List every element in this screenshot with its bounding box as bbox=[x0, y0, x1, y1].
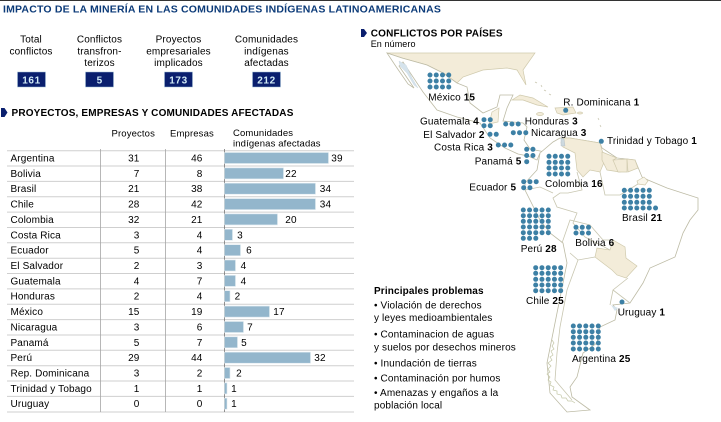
row: El Salvador: 3 bbox=[197, 261, 203, 272]
row: Panamá: Panamá bbox=[10, 338, 49, 349]
row: Rep. Dominicana: 2 bbox=[197, 368, 203, 380]
row: Chile bbox=[10, 199, 331, 211]
stat: total conflictos bbox=[9, 34, 53, 87]
row: Trinidad y Tobago: 1 bbox=[231, 384, 237, 395]
country labels: Guatemala 4 bbox=[420, 116, 479, 128]
table headers: Comunidades bbox=[233, 128, 293, 139]
country labels: El Salvador 2 bbox=[423, 130, 485, 141]
land: South America bbox=[525, 138, 698, 412]
row: Ecuador: 6 bbox=[246, 246, 252, 257]
dots: Uruguay bbox=[620, 300, 624, 304]
row: Costa Rica: 3 bbox=[134, 230, 140, 241]
land: Guyana bbox=[602, 152, 620, 172]
row: Panamá: 5 bbox=[134, 338, 140, 349]
dots: Colombia bbox=[549, 156, 568, 174]
text block: principales problemas: • Violación de derechos bbox=[374, 301, 482, 312]
row: Chile: 42 bbox=[191, 200, 203, 211]
table headers: Proyectos bbox=[112, 128, 155, 140]
row: Colombia: 20 bbox=[285, 215, 297, 226]
land: United States bbox=[387, 53, 535, 85]
row: Costa Rica: 3 bbox=[237, 230, 243, 241]
row: El Salvador bbox=[10, 260, 247, 272]
country labels: R. Dominicana 1 bbox=[563, 98, 640, 108]
row: Ecuador: 5 bbox=[134, 246, 140, 257]
row: Trinidad y Tobago bbox=[10, 383, 237, 395]
row: Trinidad y Tobago: Trinidad y Tobago bbox=[10, 384, 92, 395]
land: Belize and Guatemala bbox=[489, 108, 499, 124]
land: Mexico and Central America bbox=[387, 53, 545, 160]
country labels: Panamá 5 bbox=[475, 156, 522, 168]
row: Bolivia: 22 bbox=[285, 169, 297, 180]
row: Colombia: 32 bbox=[128, 215, 140, 226]
row: Perú: Perú bbox=[10, 353, 32, 364]
stat: conflictos transfronterizos: terizos bbox=[84, 58, 115, 69]
row: Trinidad y Tobago: 1 bbox=[197, 384, 203, 395]
row: Argentina bbox=[10, 152, 343, 164]
table: proyectos, empresas y comunidades bbox=[7, 128, 354, 412]
stat: proyectos empresariales: implicados bbox=[154, 58, 203, 69]
country labels: Argentina 25 bbox=[572, 354, 631, 365]
row: Costa Rica bbox=[10, 229, 243, 241]
row: Guatemala: 4 bbox=[134, 276, 140, 287]
country labels: Brasil 21 bbox=[622, 213, 662, 224]
row: Nicaragua bbox=[10, 322, 253, 334]
row: Bolivia: Bolivia bbox=[10, 169, 41, 180]
stat: proyectos empresariales bbox=[146, 34, 211, 87]
row: Costa Rica: 4 bbox=[197, 230, 203, 241]
stat: conflictos transfronterizos: Conflictos bbox=[77, 34, 122, 46]
row: El Salvador: 4 bbox=[241, 261, 247, 272]
row: Nicaragua: 7 bbox=[247, 322, 253, 334]
row: Perú: 32 bbox=[314, 353, 326, 364]
row: Costa Rica: Costa Rica bbox=[10, 230, 61, 241]
heading: proyectos, empresas y comunidades: PROYECTOS, EMPRESAS Y COMUNIDADES AFECTADAS bbox=[12, 108, 294, 119]
country labels: México 15 bbox=[428, 92, 475, 103]
land: Caribbean islands bbox=[512, 82, 601, 127]
row: México bbox=[10, 306, 285, 318]
row: Bolivia: 8 bbox=[197, 169, 203, 180]
country labels: Trinidad y Tobago 1 bbox=[607, 136, 697, 147]
dots: Panamá bbox=[524, 149, 534, 164]
country labels: Ecuador 5 bbox=[469, 182, 516, 194]
row: Rep. Dominicana: Rep. Dominicana bbox=[10, 368, 90, 380]
row: Uruguay: 1 bbox=[231, 399, 237, 410]
dots: México bbox=[430, 75, 449, 87]
stat: conflictos transfronterizos bbox=[77, 34, 122, 87]
stat: proyectos empresariales: empresariales bbox=[146, 46, 211, 58]
dots: Guatemala bbox=[484, 120, 491, 126]
row: Colombia: 21 bbox=[191, 215, 203, 226]
row: Rep. Dominicana bbox=[10, 368, 242, 380]
row: Guatemala: Guatemala bbox=[10, 276, 61, 287]
Río de la Plata bbox=[611, 305, 618, 311]
country labels: Honduras 3 bbox=[525, 116, 578, 128]
row: Honduras: 2 bbox=[134, 292, 140, 303]
row: El Salvador: 2 bbox=[134, 261, 140, 272]
row: Ecuador: Ecuador bbox=[10, 246, 49, 257]
row: México: 19 bbox=[191, 307, 203, 318]
country labels: Uruguay 1 bbox=[618, 308, 665, 318]
fjords of southern Chile bbox=[547, 340, 575, 403]
country labels: Perú 28 bbox=[521, 244, 557, 255]
table headers: indígenas afectadas bbox=[233, 138, 321, 150]
dots: Trinidad y Tobago bbox=[599, 139, 604, 144]
country labels: Colombia 16 bbox=[545, 179, 603, 190]
land: Suriname bbox=[613, 159, 627, 172]
row: Brasil: 38 bbox=[191, 184, 203, 195]
country labels: Costa Rica 3 bbox=[434, 142, 493, 154]
stat: total conflictos: Total bbox=[20, 34, 42, 46]
dots: El Salvador bbox=[490, 132, 497, 137]
stat: total conflictos: conflictos bbox=[9, 46, 53, 58]
row: Perú bbox=[10, 352, 326, 364]
heading: conflictos por países bbox=[361, 27, 503, 49]
row: Guatemala: 7 bbox=[197, 276, 203, 287]
row: Argentina: Argentina bbox=[10, 154, 55, 164]
borders bbox=[525, 172, 638, 400]
land: Guyane coast box bbox=[637, 177, 648, 185]
row: Argentina: 39 bbox=[331, 154, 343, 164]
text block: principales problemas: • Contaminación por humos bbox=[374, 373, 501, 384]
text block: principales problemas: y leyes medioambientales bbox=[374, 313, 492, 324]
row: Bolivia: 7 bbox=[134, 169, 140, 180]
row: Panamá bbox=[10, 337, 247, 349]
row: México: 15 bbox=[128, 307, 140, 318]
text block: principales problemas: y suelos por desechos mineros bbox=[374, 342, 516, 353]
row: Chile: 34 bbox=[320, 200, 331, 211]
dots: Nicaragua bbox=[513, 130, 526, 135]
row: Perú: 44 bbox=[191, 353, 203, 364]
row: Chile: 28 bbox=[128, 200, 140, 211]
table headers bbox=[112, 128, 321, 150]
stat: proyectos empresariales: Proyectos bbox=[156, 34, 201, 46]
text block: principales problemas: población local bbox=[374, 401, 442, 412]
row: Uruguay: Uruguay bbox=[10, 399, 49, 410]
row: Rep. Dominicana: 3 bbox=[134, 368, 140, 380]
land: Venezuela bbox=[561, 138, 605, 177]
dots: Brasil bbox=[624, 190, 656, 208]
row: Perú: 29 bbox=[128, 353, 140, 364]
stat: conflictos transfronterizos: transfron- bbox=[77, 46, 122, 58]
Lake Maracaibo bbox=[561, 138, 565, 146]
stat: comunidades indígenas: 212 bbox=[257, 76, 276, 86]
row: Colombia bbox=[10, 214, 297, 226]
country labels: Nicaragua 3 bbox=[531, 128, 587, 139]
row: Panamá: 7 bbox=[197, 338, 203, 349]
row: México: 17 bbox=[273, 307, 285, 318]
row: Uruguay: 0 bbox=[134, 399, 140, 410]
row: Honduras bbox=[10, 291, 241, 303]
title: IMPACTO DE LA MINERÍA EN LAS COMUNIDADES INDÍGENAS LATINOAMERICANAS bbox=[3, 2, 441, 16]
stat: proyectos empresariales: 173 bbox=[169, 76, 188, 86]
dots: Chile bbox=[536, 268, 561, 291]
row: Honduras: Honduras bbox=[10, 292, 55, 303]
land: Paraguay bbox=[595, 240, 637, 278]
row: Honduras: 2 bbox=[235, 292, 241, 303]
heading: conflictos por países: En número bbox=[371, 39, 416, 49]
dots: R. Dominicana bbox=[563, 108, 568, 113]
text block: principales problemas: • Inundación de tierras bbox=[374, 359, 477, 370]
text block: principales problemas bbox=[374, 286, 516, 412]
country labels bbox=[420, 92, 697, 365]
heading: conflictos por países: CONFLICTOS POR PAÍSES bbox=[371, 27, 503, 40]
dots: Honduras bbox=[506, 122, 519, 126]
dots: Costa Rica bbox=[498, 142, 511, 148]
stat: conflictos transfronterizos: 5 bbox=[97, 76, 103, 86]
stat: comunidades indígenas: indígenas bbox=[244, 46, 289, 58]
row: Argentina: 31 bbox=[128, 154, 140, 164]
row: El Salvador: El Salvador bbox=[10, 261, 64, 272]
row: Bolivia bbox=[10, 168, 297, 180]
panel: summary totals bbox=[9, 34, 298, 87]
dots: Argentina bbox=[573, 326, 599, 349]
text block: principales problemas: Principales problemas bbox=[374, 286, 484, 297]
country labels: Chile 25 bbox=[526, 296, 564, 307]
row: Ecuador bbox=[10, 245, 252, 257]
dots: Perú bbox=[523, 210, 549, 238]
row: Brasil: Brasil bbox=[10, 184, 36, 195]
dots: Ecuador bbox=[524, 182, 537, 188]
text block: principales problemas: • Amenazas y engaños a la bbox=[374, 388, 499, 399]
row: Rep. Dominicana: 2 bbox=[236, 368, 242, 380]
land: French Guiana bbox=[627, 159, 638, 172]
row: Argentina: 46 bbox=[191, 154, 203, 164]
row: Nicaragua: 6 bbox=[197, 322, 203, 334]
row: Brasil: 21 bbox=[128, 184, 140, 195]
stat: comunidades indígenas: Comunidades bbox=[235, 34, 298, 46]
map: Latin America bbox=[387, 53, 698, 412]
stat: comunidades indígenas: afectadas bbox=[244, 58, 289, 69]
row: Guatemala bbox=[10, 275, 247, 287]
row: Guatemala: 4 bbox=[241, 276, 247, 287]
stat: total conflictos: 161 bbox=[22, 76, 41, 86]
country labels: Bolivia 6 bbox=[575, 238, 615, 249]
row: Trinidad y Tobago: 1 bbox=[134, 384, 140, 395]
dots: Bolivia bbox=[576, 227, 589, 233]
row: Colombia: Colombia bbox=[10, 215, 54, 226]
row: Nicaragua: 3 bbox=[134, 322, 140, 334]
row: Brasil bbox=[10, 183, 331, 195]
stat: comunidades indígenas bbox=[235, 34, 298, 87]
row: Ecuador: 4 bbox=[197, 246, 203, 257]
gulf of California bbox=[399, 61, 418, 88]
row: Chile: Chile bbox=[10, 200, 34, 211]
row: Honduras: 4 bbox=[197, 292, 203, 303]
row: Brasil: 34 bbox=[320, 184, 331, 195]
table headers: Empresas bbox=[170, 128, 214, 140]
text block: principales problemas: • Contaminacion de aguas bbox=[374, 330, 494, 341]
row: Panamá: 5 bbox=[241, 338, 247, 349]
row: Uruguay: 0 bbox=[197, 399, 203, 410]
row: México: México bbox=[10, 307, 43, 318]
row: Uruguay bbox=[10, 398, 237, 410]
row: Nicaragua: Nicaragua bbox=[10, 322, 58, 334]
